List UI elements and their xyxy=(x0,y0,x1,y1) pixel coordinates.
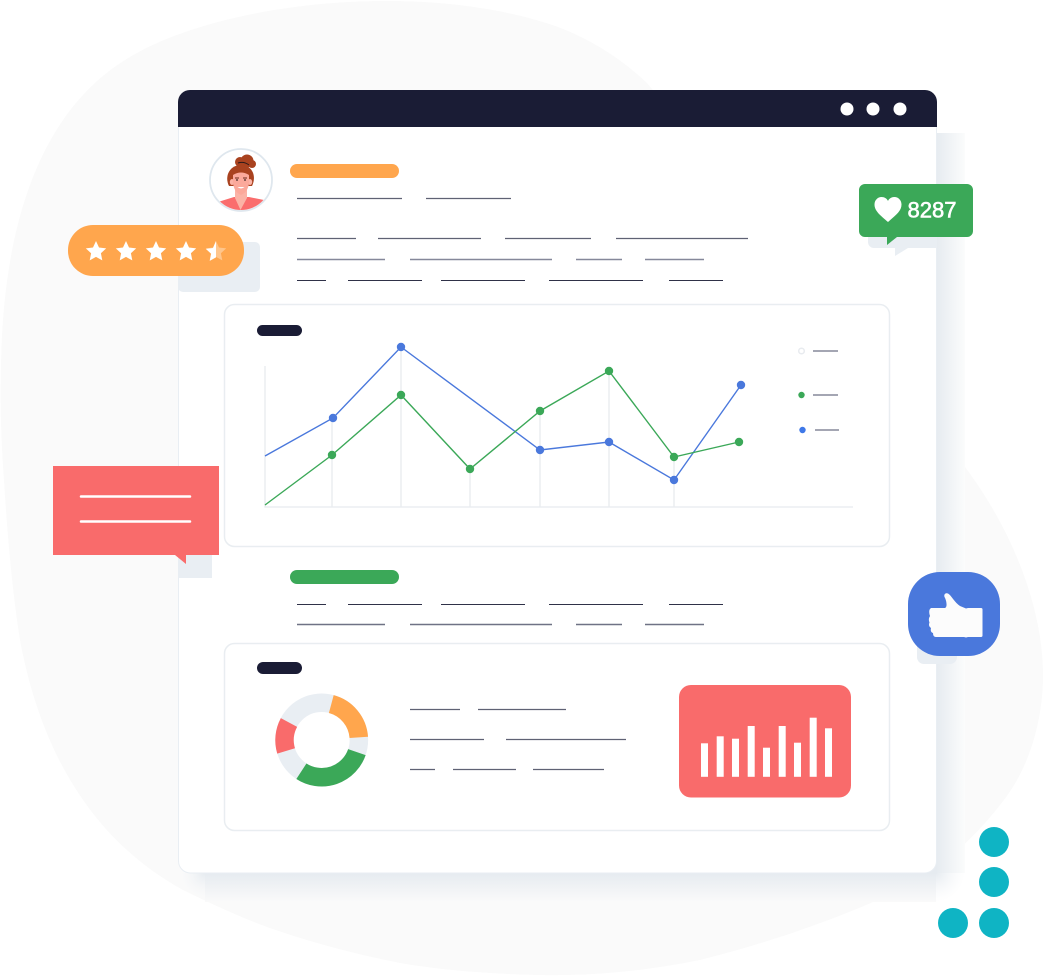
panel title bar xyxy=(257,662,302,674)
browser window xyxy=(178,90,937,873)
avatar: woman with hair bun xyxy=(210,149,272,214)
rating badge xyxy=(68,225,260,292)
red bar chart card xyxy=(679,685,851,798)
text block: middle lines xyxy=(297,604,723,624)
blue data line xyxy=(265,343,745,484)
like count bubble xyxy=(859,184,973,256)
chart legend xyxy=(798,348,839,433)
icon: thumbs up xyxy=(929,593,982,638)
decorative teal dots xyxy=(938,827,1009,938)
window title bar xyxy=(178,90,937,127)
rating stars xyxy=(86,241,226,261)
text block: top intro lines xyxy=(297,198,748,280)
icon: heart xyxy=(874,197,902,222)
donut chart xyxy=(284,703,359,777)
comment text lines xyxy=(81,496,190,522)
heading pill: green xyxy=(290,570,399,584)
panel: donut and bar chart xyxy=(224,644,890,830)
chart title bar xyxy=(257,325,302,336)
like count number: 8287 xyxy=(908,198,956,222)
text block: donut legend lines xyxy=(410,710,626,770)
window control dots xyxy=(840,102,906,116)
thumbs up badge xyxy=(908,572,1000,664)
heading pill: orange xyxy=(290,164,399,178)
comment bubble xyxy=(53,466,219,578)
window shadow xyxy=(180,133,965,902)
illustration: analytics dashboard xyxy=(53,90,1009,938)
green data line xyxy=(265,367,743,505)
chart axes and grid xyxy=(265,347,853,507)
panel: line chart xyxy=(224,304,890,546)
